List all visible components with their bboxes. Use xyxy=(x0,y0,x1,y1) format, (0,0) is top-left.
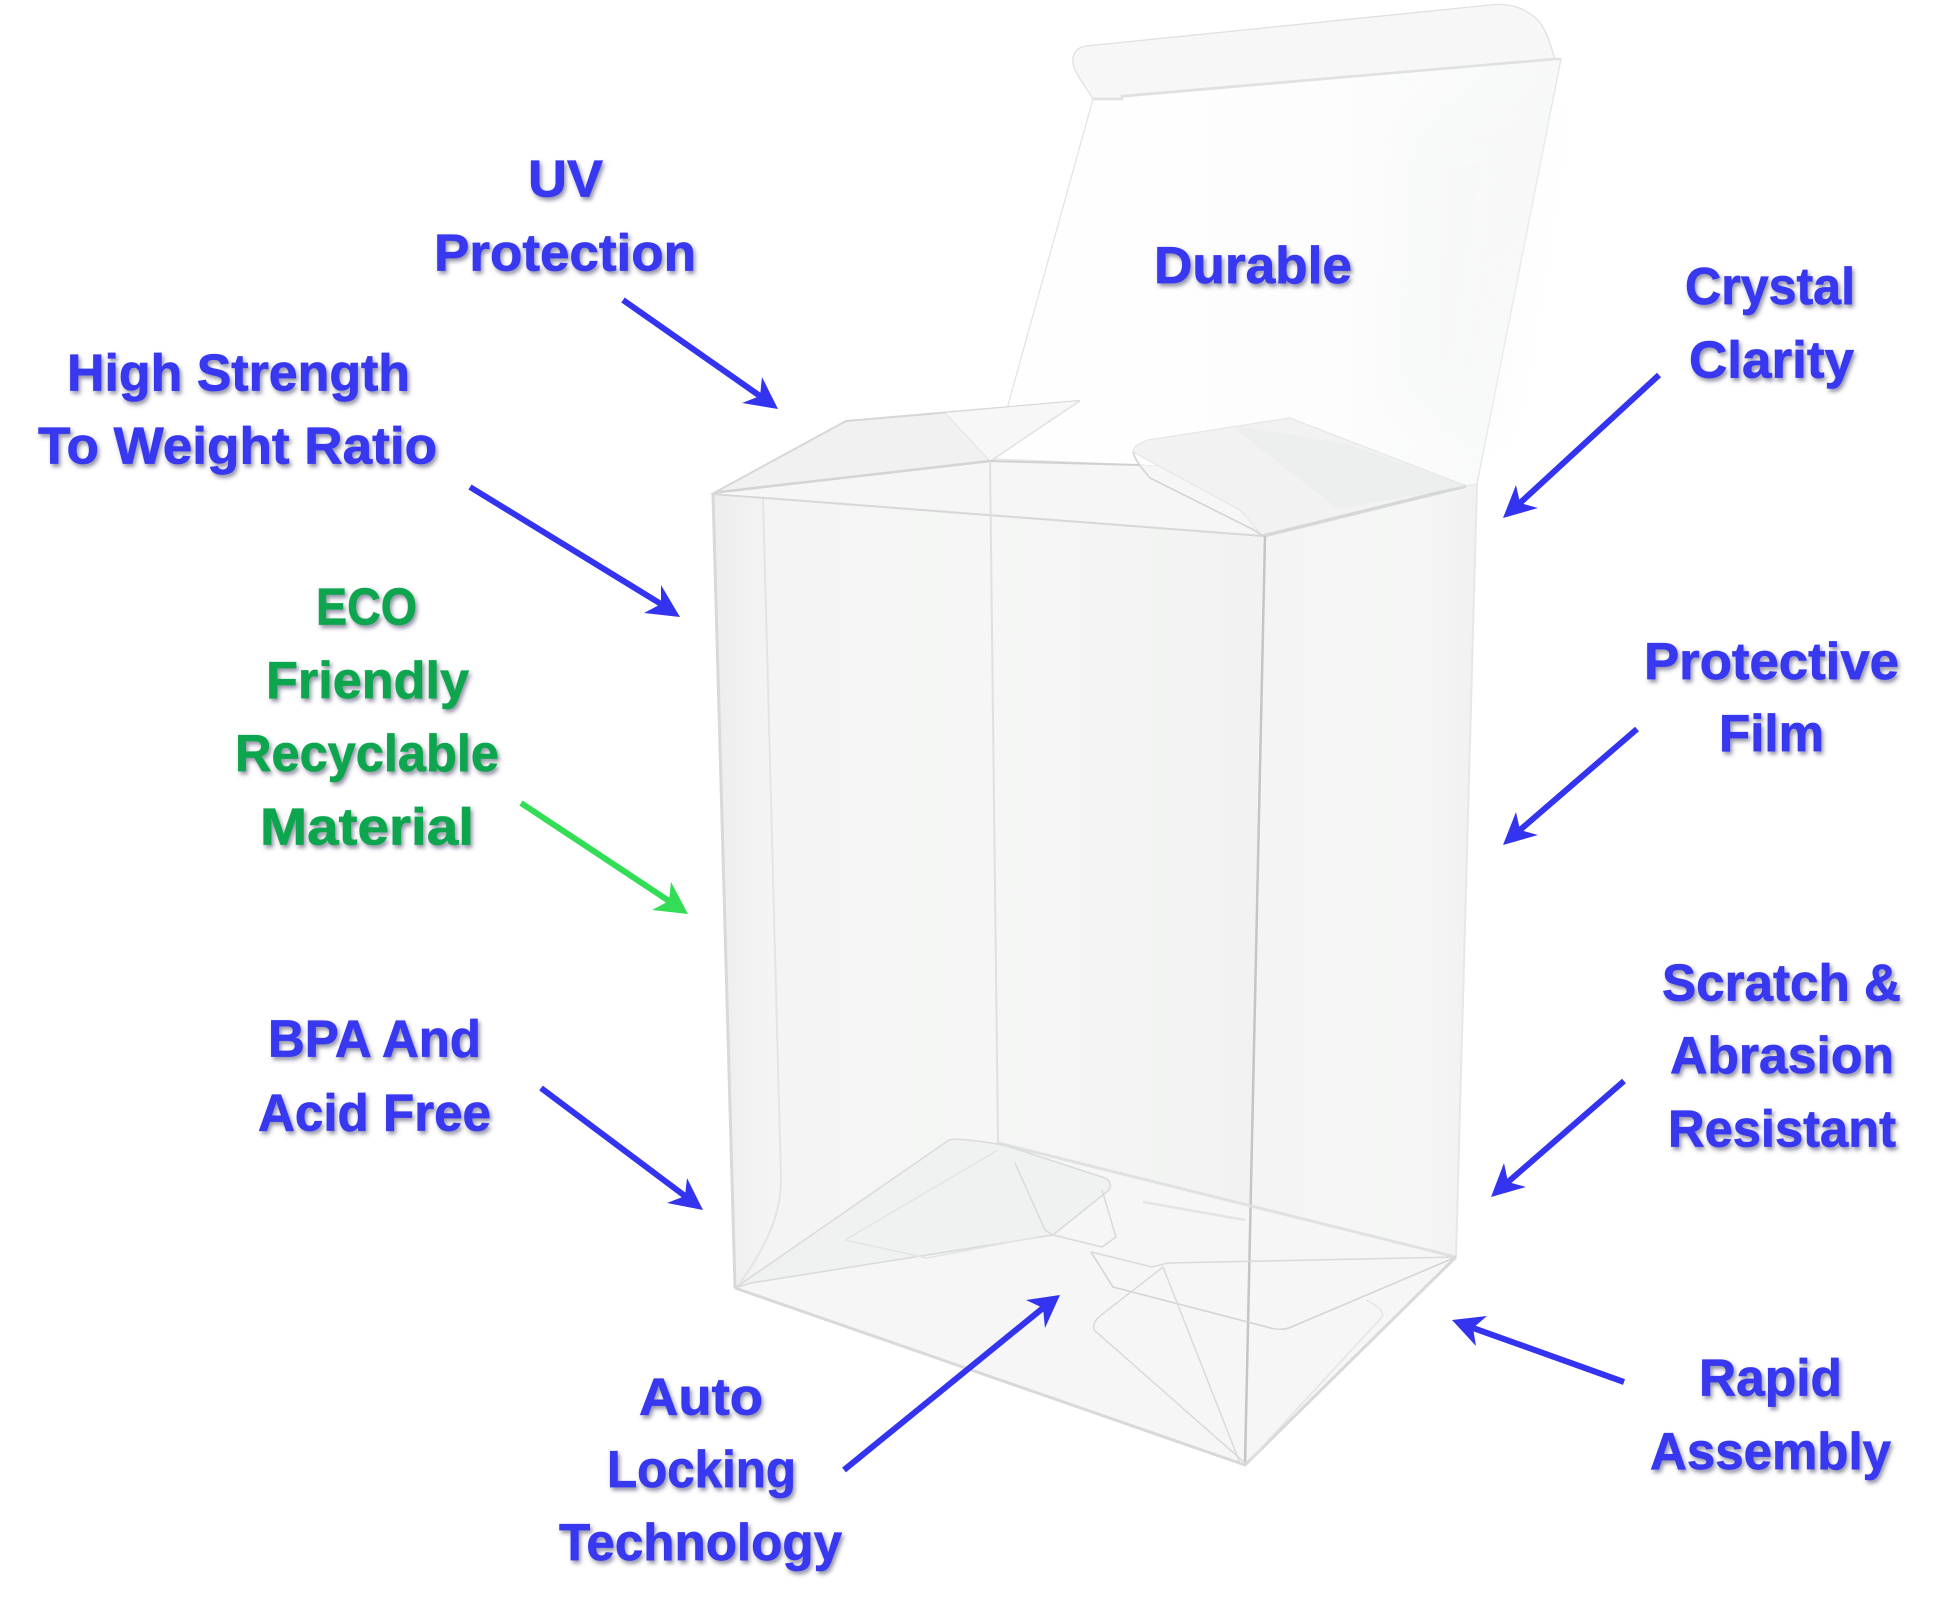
label: Durable: Durable xyxy=(1154,237,1352,295)
label: Auto Locking Technology: Technology xyxy=(559,1514,842,1572)
label: ECO Friendly Recyclable Material: Material xyxy=(260,798,474,856)
label: ECO Friendly Recyclable Material: ECO xyxy=(316,578,417,636)
label: Rapid Assembly xyxy=(1650,1350,1891,1481)
bottom locking flaps xyxy=(735,1139,1456,1463)
arrow: BPA xyxy=(541,1088,703,1210)
arrow: Auto Locking xyxy=(844,1295,1060,1470)
arrow: High Strength xyxy=(470,487,680,617)
label: BPA And Acid Free: Acid Free xyxy=(258,1084,491,1142)
label: Auto Locking Technology: Auto xyxy=(639,1368,763,1426)
label: Protective Film xyxy=(1644,633,1899,763)
label: Scratch & Abrasion Resistant xyxy=(1662,954,1901,1158)
open lid panel xyxy=(993,59,1561,486)
label: High Strength To Weight Ratio: High Strength xyxy=(67,344,410,402)
label: ECO Friendly Recyclable Material xyxy=(235,578,499,856)
label: UV Protection: UV xyxy=(528,150,603,208)
label: Protective Film: Film xyxy=(1719,705,1824,763)
box right face xyxy=(1245,484,1477,1465)
label: ECO Friendly Recyclable Material: Friendly xyxy=(266,652,469,710)
box left front face xyxy=(713,494,1263,1465)
label: BPA And Acid Free xyxy=(258,1010,491,1142)
left top flap xyxy=(712,401,1079,494)
label: Auto Locking Technology: Locking xyxy=(607,1441,796,1499)
label: High Strength To Weight Ratio: To Weight Ratio xyxy=(38,418,437,476)
arrow: Crystal Clarity xyxy=(1503,375,1659,518)
box edges xyxy=(713,461,1477,1465)
label: Scratch & Abrasion Resistant: Abrasion xyxy=(1670,1027,1894,1085)
lid closing tab xyxy=(1073,4,1561,99)
box top opening xyxy=(720,461,1466,536)
arrow: UV Protection xyxy=(623,300,778,409)
label: Scratch & Abrasion Resistant: Resistant xyxy=(1668,1100,1896,1158)
arrow: ECO xyxy=(521,803,688,914)
box floor shading xyxy=(735,1143,1456,1465)
arrow: Protective Film xyxy=(1503,729,1637,845)
label: Scratch & Abrasion Resistant: Scratch & xyxy=(1662,954,1901,1012)
label: Crystal Clarity: Clarity xyxy=(1689,332,1854,390)
label: Crystal Clarity xyxy=(1685,258,1855,390)
label: UV Protection xyxy=(434,150,696,282)
label: Rapid Assembly: Assembly xyxy=(1650,1423,1891,1481)
label: Auto Locking Technology xyxy=(559,1368,842,1572)
arrow: Rapid Assembly xyxy=(1452,1316,1624,1382)
label: Protective Film: Protective xyxy=(1644,633,1899,691)
label: UV Protection: Protection xyxy=(434,224,696,282)
label: Rapid Assembly: Rapid xyxy=(1699,1350,1842,1408)
label: ECO Friendly Recyclable Material: Recyclable xyxy=(235,725,499,783)
label: High Strength To Weight Ratio xyxy=(38,344,437,476)
arrow: Scratch & Abrasion xyxy=(1491,1081,1624,1197)
clear box illustration xyxy=(712,4,1561,1465)
label: Crystal Clarity: Crystal xyxy=(1685,258,1855,316)
label: BPA And Acid Free: BPA And xyxy=(268,1010,481,1068)
right top flap xyxy=(1133,418,1466,536)
